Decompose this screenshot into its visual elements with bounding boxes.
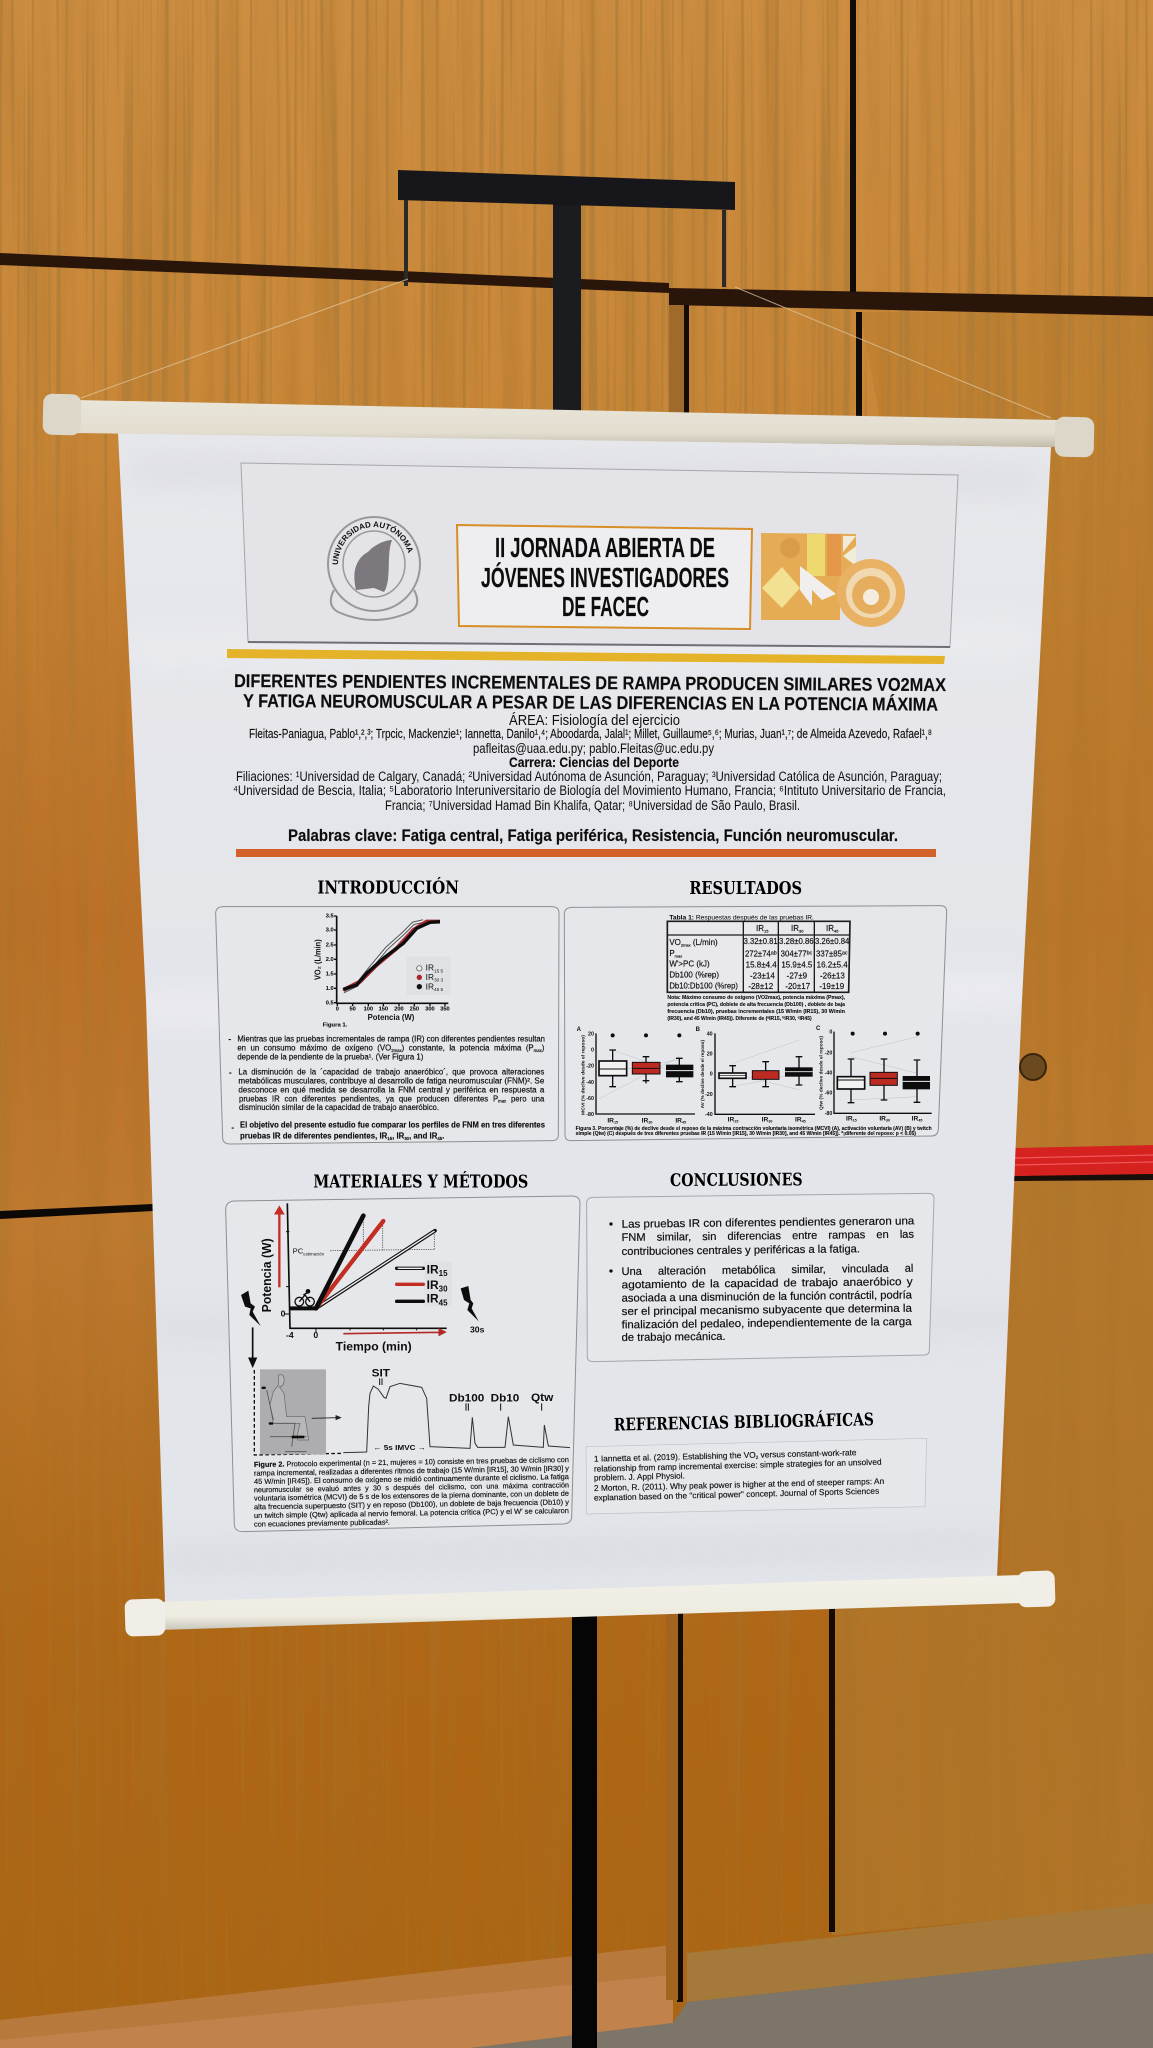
table 1: IR	[826, 924, 834, 933]
chart B: AV box plot: B	[696, 1027, 701, 1033]
chart A: MCVI box plot	[577, 1027, 695, 1124]
hole in wall	[1020, 1054, 1046, 1080]
table 1: 15.9±4.5	[781, 961, 813, 970]
table note: frecuencia (Db10), pruebas incrementales (15 W/min (IR15), 30 W/min	[667, 1009, 846, 1015]
text: conclusions: Una alteración metabólica similar, vinculada al	[622, 1263, 913, 1278]
chart A: MCVI box plot: IR	[675, 1117, 682, 1124]
text: introduction bullets: 15	[387, 1136, 393, 1141]
arrow: photo to trace	[312, 1416, 341, 1420]
legend: IR	[427, 1292, 439, 1306]
text: introduction bullets: en un consumo máximo de oxígeno (VO	[237, 1044, 394, 1053]
text: introduction bullets: pruebas IR de diferentes pendientes, IR	[240, 1132, 390, 1141]
table 1: 3.26±0.84	[815, 937, 850, 946]
keywords: Palabras clave: Fatiga central, Fatiga periférica, Resistencia, Función neuromuscular.	[288, 827, 898, 845]
table 1: 16.2±5.4	[817, 961, 848, 970]
chart B: AV box plot: AV (% declive desde el reposo)	[700, 1040, 706, 1108]
chart B: AV box plot: 45	[802, 1120, 806, 1124]
chart: VO2 vs power: 350	[440, 1006, 450, 1012]
axis label: tiempo: Tiempo (min)	[336, 1340, 412, 1354]
text: references: versus constant-work-rate	[758, 1447, 857, 1460]
arrow: down to testing	[249, 1327, 256, 1366]
heading: materiales y metodos: MATERIALES Y MÉTODOS	[313, 1172, 528, 1193]
table 1: Tabla 1: Respuestas después de las pruebas IR.	[669, 914, 814, 921]
authors: Fleitas-Paniagua, Pablo¹,²,³; Trpcic, Mackenzie¹; Iannetta, Danilo¹,⁴; Aboodarda, Jalal¹; Millet, Guillaume⁵,⁶; Murias, Juan¹,⁷; de Almeida Azevedo, Rafael¹,⁸	[249, 727, 932, 741]
chart: VO2 vs power: 1.5	[326, 972, 334, 978]
table 1: 3.32±0.81	[744, 937, 778, 946]
chart: VO2 vs power: Potencia (W)	[368, 1013, 415, 1022]
affiliations: ⁴Universidad de Bescia, Italia; ⁵Laboratorio Interuniversitario de Biología del Movimiento Humano, Francia; ⁶Intituto Universitario de Francia,	[233, 783, 946, 798]
table 1: 272±74ᵃᵇ	[745, 950, 777, 959]
table 1: -23±14	[750, 971, 775, 980]
baseboards	[0, 1945, 673, 2048]
carpet	[470, 1953, 1153, 2048]
legend: IR	[427, 1278, 439, 1292]
chart A: MCVI box plot: 15	[614, 1120, 618, 1124]
event title box	[457, 525, 752, 629]
chart: VO2 vs power: 0.5	[326, 1000, 334, 1006]
panel: resultados	[564, 906, 947, 1141]
heading: referencias: REFERENCIAS BIBLIOGRÁFICAS	[614, 1409, 874, 1436]
chart C: Qtw box plot: 30	[886, 1118, 890, 1122]
chart B: AV box plot: -40	[705, 1112, 713, 1118]
orange divider	[236, 849, 936, 857]
chart: VO2 vs power: 45 5	[434, 987, 443, 992]
text: introduction bullets: pruebas IR con diferentes pendientes, ya que producen diferentes P	[239, 1094, 504, 1103]
trace labels: Qtw	[531, 1392, 554, 1404]
chart C: Qtw box plot: -80	[825, 1111, 832, 1117]
chart: VO2 vs power: VO₂ (L/min)	[313, 939, 323, 980]
icon: university seal	[327, 516, 421, 621]
chart: VO2 vs power: 2.0	[326, 957, 334, 963]
chart A: MCVI box plot: 45	[682, 1120, 686, 1124]
icon: university seal: UNIVERSIDAD AUTÓNOMA	[332, 522, 413, 564]
icon: lightning left	[241, 1291, 261, 1326]
text: conclusions	[609, 1215, 915, 1344]
chart A: MCVI box plot: -80	[586, 1112, 594, 1118]
table note: (IR30), and 45 W/min (IR45)). Diferente de (ᵃIR15, ᵇIR30, ᶜIR45)	[667, 1015, 812, 1022]
panel: introduccion	[216, 907, 559, 1144]
table 1: max	[675, 953, 682, 958]
text: conclusions: ser el principal mecanismo subyacente que determina la	[622, 1303, 913, 1318]
table 1	[667, 914, 850, 992]
text: references: relationship from ramp incremental exercise: simple strategies for an unsolved	[594, 1457, 882, 1474]
section: conclusiones y referencias	[586, 1170, 934, 1514]
chart: VO2 vs power: 150	[379, 1006, 388, 1012]
table 1: -28±12	[748, 982, 774, 991]
text: conclusions: de trabajo mecánica.	[622, 1331, 726, 1344]
chart: VO2 vs power: 2.5	[326, 943, 334, 949]
chart B: AV box plot: 30	[768, 1120, 772, 1124]
table note: potencia crítica (PC), doblete de alta frecuencia (Db100) , doblete de baja	[667, 1002, 846, 1008]
chart A: MCVI box plot: IR	[607, 1117, 614, 1124]
icon: cyclist	[295, 1290, 314, 1306]
text: introduction bullets: 30	[404, 1136, 410, 1141]
table 1: 3.28±0.86	[779, 937, 814, 946]
chart A: MCVI box plot: -60	[586, 1096, 594, 1102]
table note	[667, 995, 846, 1022]
chart: VO2 vs power	[313, 914, 451, 1029]
event title box: JÓVENES INVESTIGADORES	[481, 562, 729, 593]
event title box: II JORNADA ABIERTA DE	[495, 532, 715, 563]
text: conclusions: FNM similar, sin diferencias entre rampas en las	[622, 1229, 915, 1244]
career: Carrera: Ciencias del Deporte	[509, 755, 679, 770]
poster title	[234, 670, 947, 715]
chart A: MCVI box plot: MCVI (% declive desde el reposo)	[580, 1035, 586, 1115]
table 1: 2max	[681, 942, 691, 947]
table 1: Db10:Db100 (%rep)	[669, 981, 738, 990]
chart C: Qtw box plot: IR	[846, 1115, 853, 1122]
poster sheet	[118, 433, 1051, 1602]
trace labels: SIT	[372, 1368, 390, 1380]
text: conclusions: finalización del pedaleo, independientemente de la carga	[622, 1316, 913, 1331]
protocol ramp chart	[260, 1203, 452, 1354]
trace labels	[372, 1368, 554, 1452]
heading: introduccion: INTRODUCCIÓN	[317, 877, 459, 898]
chart: VO2 vs power: IR	[426, 972, 434, 982]
text: introduction bullets: pero una	[506, 1094, 545, 1103]
chart C: Qtw box plot: 0	[829, 1030, 832, 1036]
text: introduction bullets: 2max	[391, 1048, 402, 1053]
table 1: 304±77ᵇᶜ	[781, 950, 812, 959]
chart C: Qtw box plot: IR	[912, 1115, 918, 1122]
protocol ramp chart: 0	[281, 1309, 286, 1319]
chart B: AV box plot: 0	[710, 1072, 713, 1078]
chart A: MCVI box plot: A	[577, 1027, 582, 1033]
text: introduction bullets: -	[229, 1068, 232, 1077]
poster title: DIFERENTES PENDIENTES INCREMENTALES DE RAMPA PRODUCEN SIMILARES VO2MAX	[234, 670, 947, 695]
chart: VO2 vs power: IR	[426, 981, 434, 991]
dashed connector	[254, 1370, 343, 1455]
table 1: 15	[764, 928, 769, 933]
area: ÁREA: Fisiología del ejercicio	[509, 712, 680, 729]
chart C: Qtw box plot	[816, 1026, 932, 1122]
section: resultados	[564, 879, 947, 1141]
text: references: 2 Morton, R. (2011). Why peak power is higher at the end of steeper ramps: An	[594, 1476, 885, 1493]
chart: VO2 vs power: IR	[426, 963, 434, 973]
chart A: MCVI box plot: 20	[588, 1032, 594, 1038]
heading: conclusiones: CONCLUSIONES	[670, 1170, 803, 1191]
table 1: 337±85ᵃᶜ	[816, 950, 848, 959]
table 1: W'>PC (kJ)	[669, 960, 710, 969]
table 1: -26±13	[820, 971, 845, 980]
axis label: potencia: Potencia (W)	[260, 1238, 274, 1312]
text: references: 2	[756, 1455, 759, 1460]
panel: conclusiones	[587, 1193, 934, 1362]
table 1: -27±9	[787, 971, 808, 980]
text: introduction bullets: max	[498, 1099, 507, 1104]
event title box: DE FACEC	[562, 591, 649, 622]
chart B: AV box plot: 15	[734, 1120, 738, 1124]
chart C: Qtw box plot: -40	[825, 1070, 832, 1076]
chart B: AV box plot: IR	[795, 1117, 802, 1124]
wall grooves	[0, 253, 1153, 316]
text: introduction bullets	[228, 1034, 546, 1141]
heading: resultados: RESULTADOS	[689, 879, 802, 899]
chart B: AV box plot	[696, 1027, 815, 1124]
text: introduction bullets: La disminución de la ´capacidad de trabajo anaeróbico´, que provoca alteraciones	[238, 1067, 544, 1076]
table 1: (L/min)	[691, 938, 718, 947]
text: introduction bullets: , and IR	[409, 1132, 438, 1141]
text: introduction bullets: -	[231, 1123, 234, 1132]
figure 2 caption: alta frecuencia superpuesto (SIT) y en reposo (Db100), un doblete de baja frecuencia (Db10) y	[254, 1497, 569, 1511]
top roller	[43, 394, 1094, 457]
text: introduction bullets: Mientras que las pruebas incrementales de rampa (IR) con diferentes pendientes resultan	[237, 1035, 545, 1044]
chart C: Qtw box plot: 15	[853, 1118, 857, 1122]
section: materiales y metodos	[226, 1172, 580, 1532]
text: introduction bullets: 45	[437, 1136, 443, 1141]
section: introduccion	[216, 877, 559, 1144]
table 1: 15.8±4.4	[746, 961, 777, 970]
icon: lightning right	[461, 1286, 479, 1321]
chart A: MCVI box plot: -20	[586, 1064, 594, 1070]
text: references: 1 Iannetta et al. (2019). Establishing the VO	[594, 1450, 756, 1464]
text: conclusions: contribuciones centrales y periféricas a la fatiga.	[622, 1243, 860, 1258]
chart C: Qtw box plot: 45	[918, 1118, 922, 1122]
icon: faculty logo	[761, 533, 905, 627]
text: introduction bullets: metabólicas musculares, contribuye al desarrollo de fatiga neuromuscular (FNM)². Se	[238, 1076, 545, 1085]
legend	[397, 1262, 452, 1307]
chart C: Qtw box plot: -20	[825, 1050, 832, 1056]
force trace	[343, 1383, 570, 1453]
text: introduction bullets: max	[534, 1048, 543, 1053]
figure 2 caption: un twitch simple (Qtw) aplicada al nervio femoral. La potencia crítica (PC) y el W′ se calcularon	[254, 1506, 569, 1520]
figure 2 caption: rampa incremental, realizadas a diferentes ritmos de trabajo (15 W/min [IR15], 30 W/min [IR30] y	[254, 1464, 569, 1478]
chart A: MCVI box plot: 0	[591, 1048, 594, 1054]
table 1: VO	[669, 938, 681, 947]
chart B: AV box plot: -20	[705, 1092, 713, 1098]
trace labels: ← 5s IMVC →	[373, 1443, 426, 1452]
figure 3 caption	[576, 1126, 932, 1137]
table 1: IR	[756, 924, 764, 933]
legend: IR	[427, 1262, 439, 1276]
arrow: time	[343, 1329, 445, 1335]
photo: seated knee extension setup	[260, 1369, 326, 1454]
chart: VO2 vs power: 200	[394, 1006, 404, 1012]
table note: Nota: Máximo consumo de oxígeno (VO2max), potencia máxima (Pmax),	[667, 995, 845, 1001]
text: conclusions: asociada a una disminución de la función contráctil, podría	[622, 1289, 913, 1305]
figure 2 caption	[254, 1455, 570, 1529]
figure 2 caption: con ecuaciones previamente publicadas².	[254, 1518, 390, 1529]
text: introduction bullets: disminución similar de la capacidad de trabajo anaeróbico.	[239, 1103, 439, 1112]
chart: VO2 vs power: Figura 1.	[323, 1023, 348, 1029]
chart B: AV box plot: IR	[762, 1117, 768, 1124]
panel: materiales y metodos	[226, 1196, 580, 1532]
chart: VO2 vs power: 0	[336, 1006, 339, 1012]
figure 2 caption: neuromuscular se evaluó antes y 30 s después del ciclismo, con una máxima contracción	[254, 1480, 569, 1494]
protocol ramp chart: -4	[286, 1330, 294, 1340]
red wall rail	[1015, 1145, 1153, 1176]
poster stand: black pole and crossbar	[81, 170, 1051, 2048]
figure 2 caption: 45 W/min [IR45]). El consumo de oxígeno se midió continuamente durante el ciclismo. La fatiga	[254, 1472, 570, 1486]
affiliations: Filiaciones: ¹Universidad de Calgary, Canadá; ²Universidad Autónoma de Asunción, Paraguay; ³Universidad Católica de Asunción, Paraguay;	[236, 769, 942, 784]
chart C: Qtw box plot: IR	[879, 1115, 886, 1122]
figure 3 caption: Figura 3. Porcentaje (%) de declive desde el reposo de la máxima contracción voluntaria isométrica (MCVI) (A), activación voluntaria (AV) (B) y twitch	[576, 1126, 932, 1132]
table 1: P	[669, 949, 675, 958]
chart C: Qtw box plot: -60	[825, 1090, 832, 1096]
bottom roller	[124, 1570, 1056, 1637]
chart: VO2 vs power: 100	[364, 1006, 373, 1012]
text: introduction bullets: , IR	[392, 1132, 405, 1141]
legend: 45	[439, 1298, 448, 1307]
text: introduction bullets: .	[442, 1132, 444, 1141]
table 1: 45	[834, 928, 839, 933]
legend: 30	[439, 1285, 448, 1294]
chart: VO2 vs power: 300	[425, 1006, 435, 1012]
table 1: IR	[791, 924, 799, 933]
text: conclusions: Las pruebas IR con diferentes pendientes generaron una	[622, 1215, 915, 1231]
chart B: AV box plot: 20	[707, 1052, 713, 1058]
emails: pafleitas@uaa.edu.py; pablo.Fleitas@uc.edu.py	[473, 741, 714, 756]
chart: VO2 vs power: 250	[410, 1006, 419, 1012]
yellow divider	[227, 649, 945, 664]
legend: 15	[439, 1269, 448, 1278]
poster wrinkles	[146, 974, 1024, 1564]
chart B: AV box plot: 40	[707, 1032, 713, 1038]
text: conclusions: agotamiento de la capacidad de trabajo anaeróbico y	[622, 1276, 913, 1291]
table 1: 30	[799, 928, 804, 933]
trace labels: Db10	[491, 1393, 519, 1405]
chart A: MCVI box plot: -40	[586, 1080, 594, 1086]
chart: VO2 vs power: 3.5	[326, 914, 334, 920]
chart: VO2 vs power: 1.0	[326, 986, 334, 992]
chart B: AV box plot: IR	[728, 1117, 734, 1124]
text: introduction bullets: depende de la pendiente de la prueba¹. (Ver Figura 1)	[237, 1052, 424, 1061]
chart: VO2 vs power: 30 3	[434, 978, 443, 983]
protocol ramp chart: PC	[293, 1247, 303, 1256]
figure 2 caption: Figure 2. Protocolo experimental (n = 21, mujeres = 10) consiste en tres pruebas de ciclismo con	[254, 1455, 569, 1469]
text: introduction bullets: )	[542, 1044, 545, 1053]
chart: VO2 vs power: 3.0	[326, 928, 334, 934]
figure 3 caption: simple (Qtw) (C) después de tres diferentes pruebas IR (15 W/min [IR15], 30 W/min [IR30], and 45 W/min [IR45]). *¡diferente del reposo: p < 0.05)	[576, 1131, 916, 1137]
chart: VO2 vs power: 15 5	[434, 968, 443, 973]
table 1: -20±17	[785, 982, 811, 991]
text: references: problem. J. Appl Physiol.	[594, 1470, 685, 1483]
poster title: Y FATIGA NEUROMUSCULAR A PESAR DE LAS DIFERENCIAS EN LA POTENCIA MÁXIMA	[243, 690, 938, 715]
text: references: explanation based on the "critical power" concept. Journal of Sports Sciences	[594, 1486, 879, 1503]
arrow: power increase	[276, 1208, 283, 1287]
text: introduction bullets: El objetivo del presente estudio fue comparar los perfiles de FNM en tres diferentes	[240, 1120, 546, 1129]
label: 30s: 30s	[470, 1324, 485, 1334]
affiliations: Francia; ⁷Universidad Hamad Bin Khalifa, Qatar; ⁸Universidad de São Paulo, Brasil.	[385, 798, 800, 813]
chart A: MCVI box plot: IR	[642, 1117, 648, 1124]
figure 2 caption: voluntaria isométrica (MCVI) de 5 s de los extensores de la pierna dominante, con un doblete de	[254, 1489, 569, 1503]
chart C: Qtw box plot: C	[816, 1026, 821, 1032]
header banner	[240, 462, 958, 648]
text: introduction bullets: -	[228, 1034, 231, 1043]
panel: referencias	[586, 1438, 927, 1514]
chart A: MCVI box plot: 30	[648, 1120, 652, 1124]
protocol ramp chart: 0	[313, 1330, 318, 1340]
text: references	[594, 1447, 885, 1503]
table 1: -19±19	[819, 982, 845, 991]
table 1: Db100 (%rep)	[669, 970, 719, 979]
poster content	[215, 462, 958, 1532]
text: introduction bullets: desconoce en qué medida se desarrolla la FNM central y periférica en respuesta a	[238, 1085, 545, 1094]
chart C: Qtw box plot: Qtw (% declive desde el reposo)	[818, 1036, 824, 1110]
protocol ramp chart: estimación	[303, 1251, 325, 1256]
affiliations	[233, 769, 946, 813]
chart: VO2 vs power: 50	[350, 1006, 356, 1012]
trace labels: Db100	[449, 1393, 484, 1405]
text: introduction bullets: ) constante, la potencia máxima (P	[402, 1044, 534, 1053]
